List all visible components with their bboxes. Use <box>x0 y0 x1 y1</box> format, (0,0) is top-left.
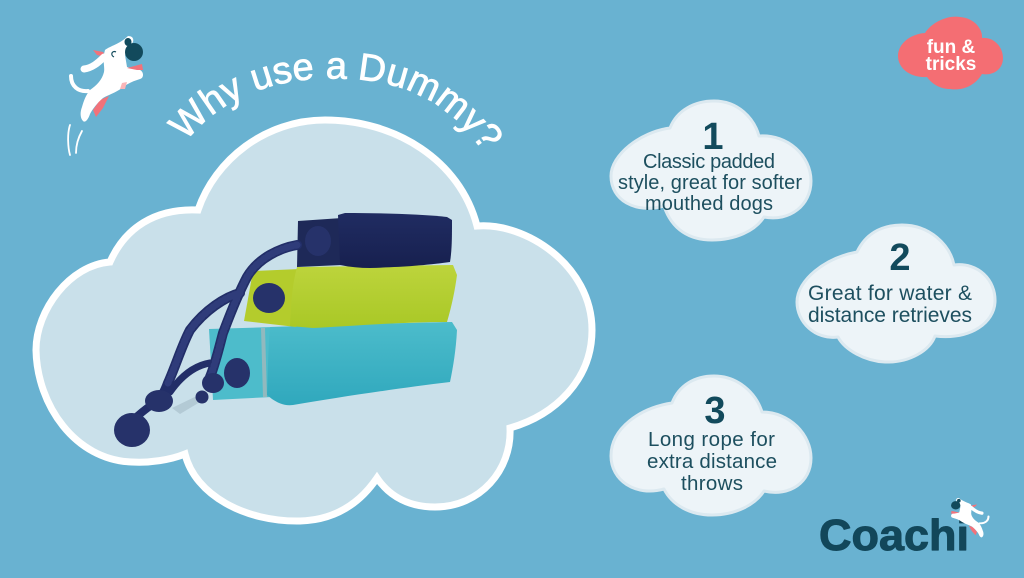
title: Why use a Dummy? <box>166 53 502 146</box>
number 3: 3 <box>704 390 726 432</box>
lime dummy <box>244 265 457 328</box>
reason 3 text: extra distance <box>647 450 777 473</box>
reason 2 text <box>808 282 972 327</box>
reason 3 text <box>647 428 777 495</box>
reason 3 text: Long rope for <box>648 428 775 451</box>
photo: stacked dummies with ropes <box>114 213 457 447</box>
badge: fun & tricks <box>898 17 1003 89</box>
navy dummy <box>297 213 452 268</box>
badge text: tricks <box>926 54 976 75</box>
ropes <box>133 245 297 420</box>
logo dog <box>951 498 988 537</box>
badge text: fun & <box>927 37 976 58</box>
reason 1 text: style, great for softer <box>618 172 802 194</box>
logo: Coachi <box>819 498 988 560</box>
teal dummy <box>209 322 457 405</box>
reason 1 text: mouthed dogs <box>645 193 773 215</box>
panel: reason 1 <box>611 101 811 240</box>
reason 1 text <box>618 151 802 215</box>
number 1: 1 <box>702 116 724 158</box>
icon: jumping dog <box>68 36 143 155</box>
rope knots <box>114 226 331 447</box>
panel: reason 2 <box>797 225 995 362</box>
logo wordmark: Coachi <box>819 511 969 560</box>
reason 2 text: Great for water & <box>808 282 972 305</box>
reason 3 text: throws <box>681 472 743 495</box>
rope shadow <box>172 392 205 414</box>
panel: reason 3 <box>611 376 811 515</box>
number 2: 2 <box>889 237 911 279</box>
reason 1 text: Classic padded <box>643 151 775 173</box>
panel: main cloud <box>36 120 592 521</box>
reason 2 text: distance retrieves <box>808 304 972 327</box>
